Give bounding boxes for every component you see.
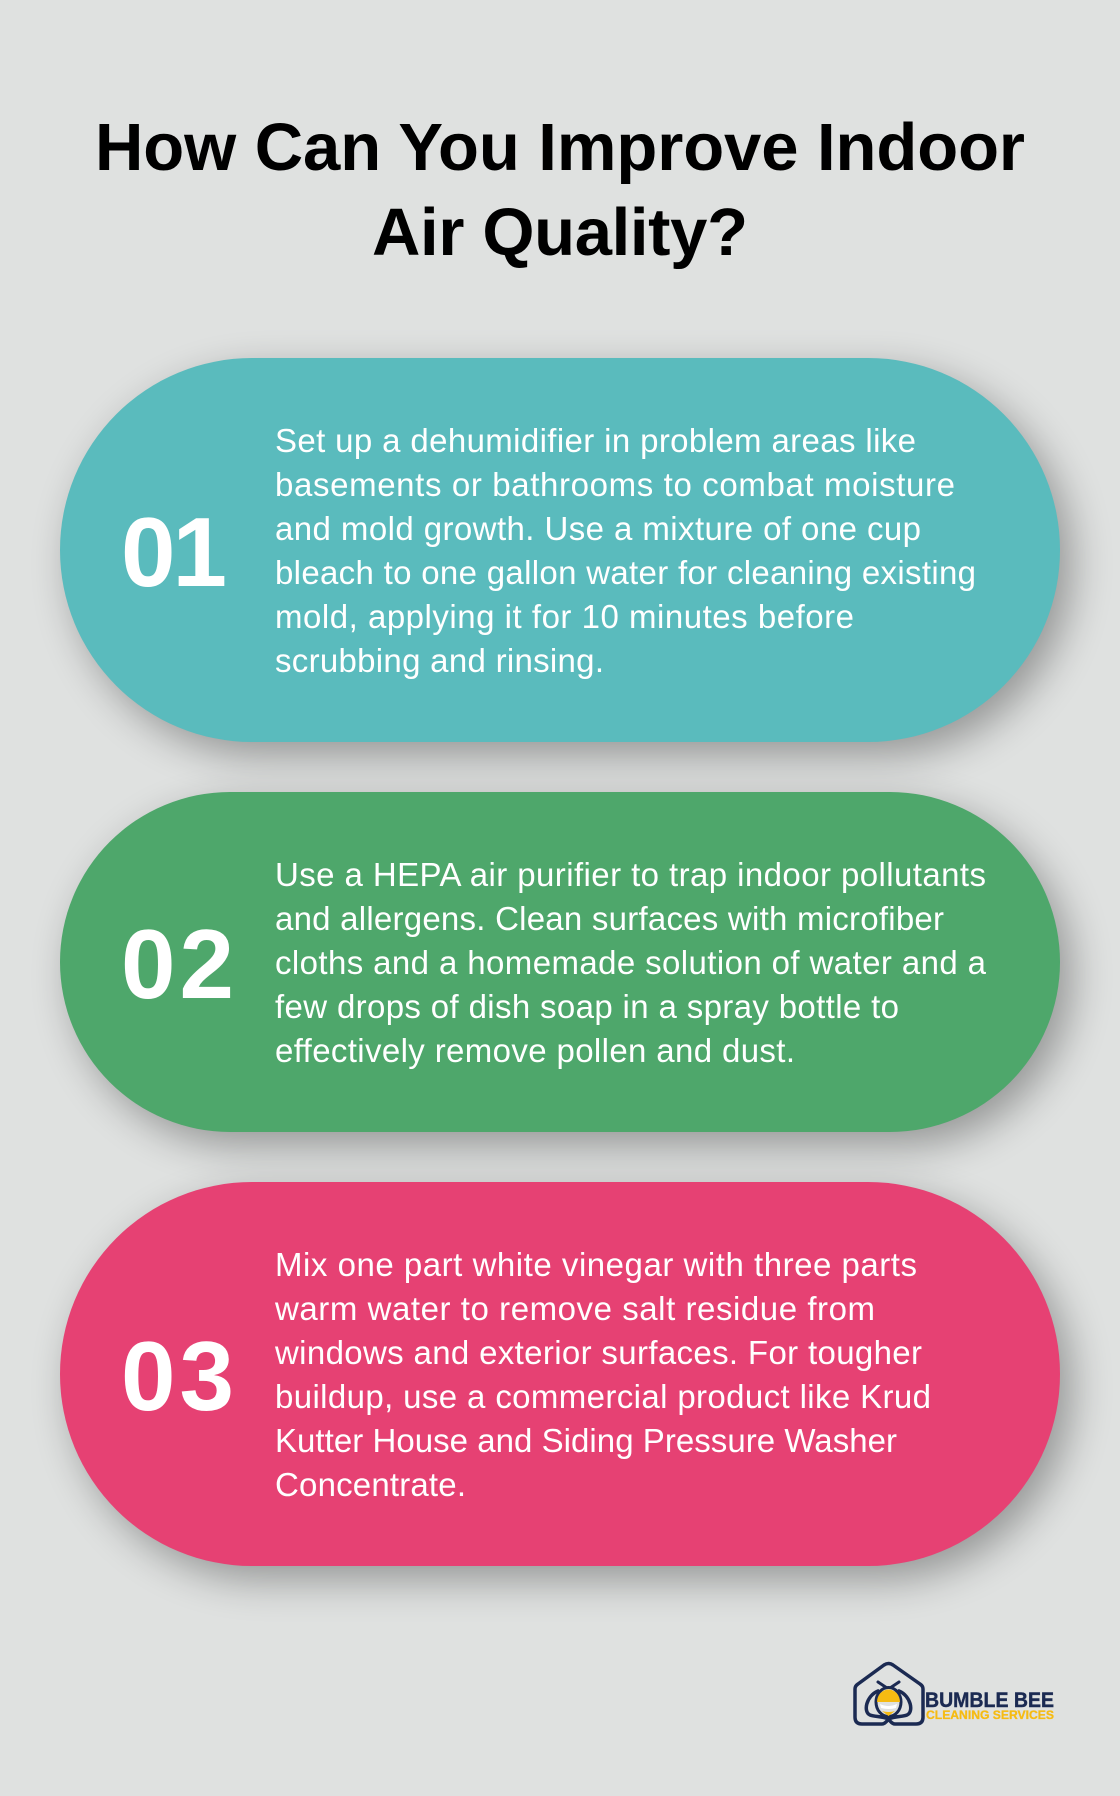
icon: house with bee: [855, 1664, 923, 1724]
title: Air Quality?: [372, 195, 748, 270]
step 01 text: bleach to one gallon water for cleaning existing: [275, 554, 976, 591]
step 03 text: Concentrate.: [275, 1466, 466, 1503]
step number 01: 01: [121, 497, 227, 607]
panel: step 02: [60, 792, 1060, 1132]
brand tagline: CLEANING SERVICES: [926, 1708, 1054, 1722]
step 03 text: Mix one part white vinegar with three parts: [275, 1246, 917, 1283]
step 02 text: and allergens. Clean surfaces with microfiber: [275, 900, 944, 937]
panel: step 03: [60, 1182, 1060, 1566]
step 03 text: buildup, use a commercial product like Krud: [275, 1378, 931, 1415]
step 03 text: windows and exterior surfaces. For tougher: [274, 1334, 922, 1371]
step 01 text: and mold growth. Use a mixture of one cup: [275, 510, 921, 547]
panel: step 01: [60, 358, 1060, 742]
brand name: BUMBLE BEE: [925, 1689, 1054, 1712]
step 02 text: few drops of dish soap in a spray bottle to: [275, 988, 899, 1025]
step 02 text: Use a HEPA air purifier to trap indoor pollutants: [275, 856, 986, 893]
step 02 text: [275, 856, 987, 1069]
step 03 text: [274, 1246, 931, 1503]
step 02 text: effectively remove pollen and dust.: [275, 1032, 795, 1069]
step 03 text: Kutter House and Siding Pressure Washer: [275, 1422, 897, 1459]
step 01 text: Set up a dehumidifier in problem areas like: [275, 422, 916, 459]
step number 03: 03: [121, 1321, 234, 1431]
step 03 text: warm water to remove salt residue from: [274, 1290, 875, 1327]
step number 02: 02: [121, 909, 234, 1019]
step 01 text: basements or bathrooms to combat moisture: [275, 466, 955, 503]
step 01 text: mold, applying it for 10 minutes before: [275, 598, 854, 635]
step 01 text: [275, 422, 976, 679]
step 02 text: cloths and a homemade solution of water and a: [275, 944, 987, 981]
step 01 text: scrubbing and rinsing.: [275, 642, 604, 679]
title: How Can You Improve Indoor: [95, 110, 1025, 185]
title: [95, 110, 1025, 270]
